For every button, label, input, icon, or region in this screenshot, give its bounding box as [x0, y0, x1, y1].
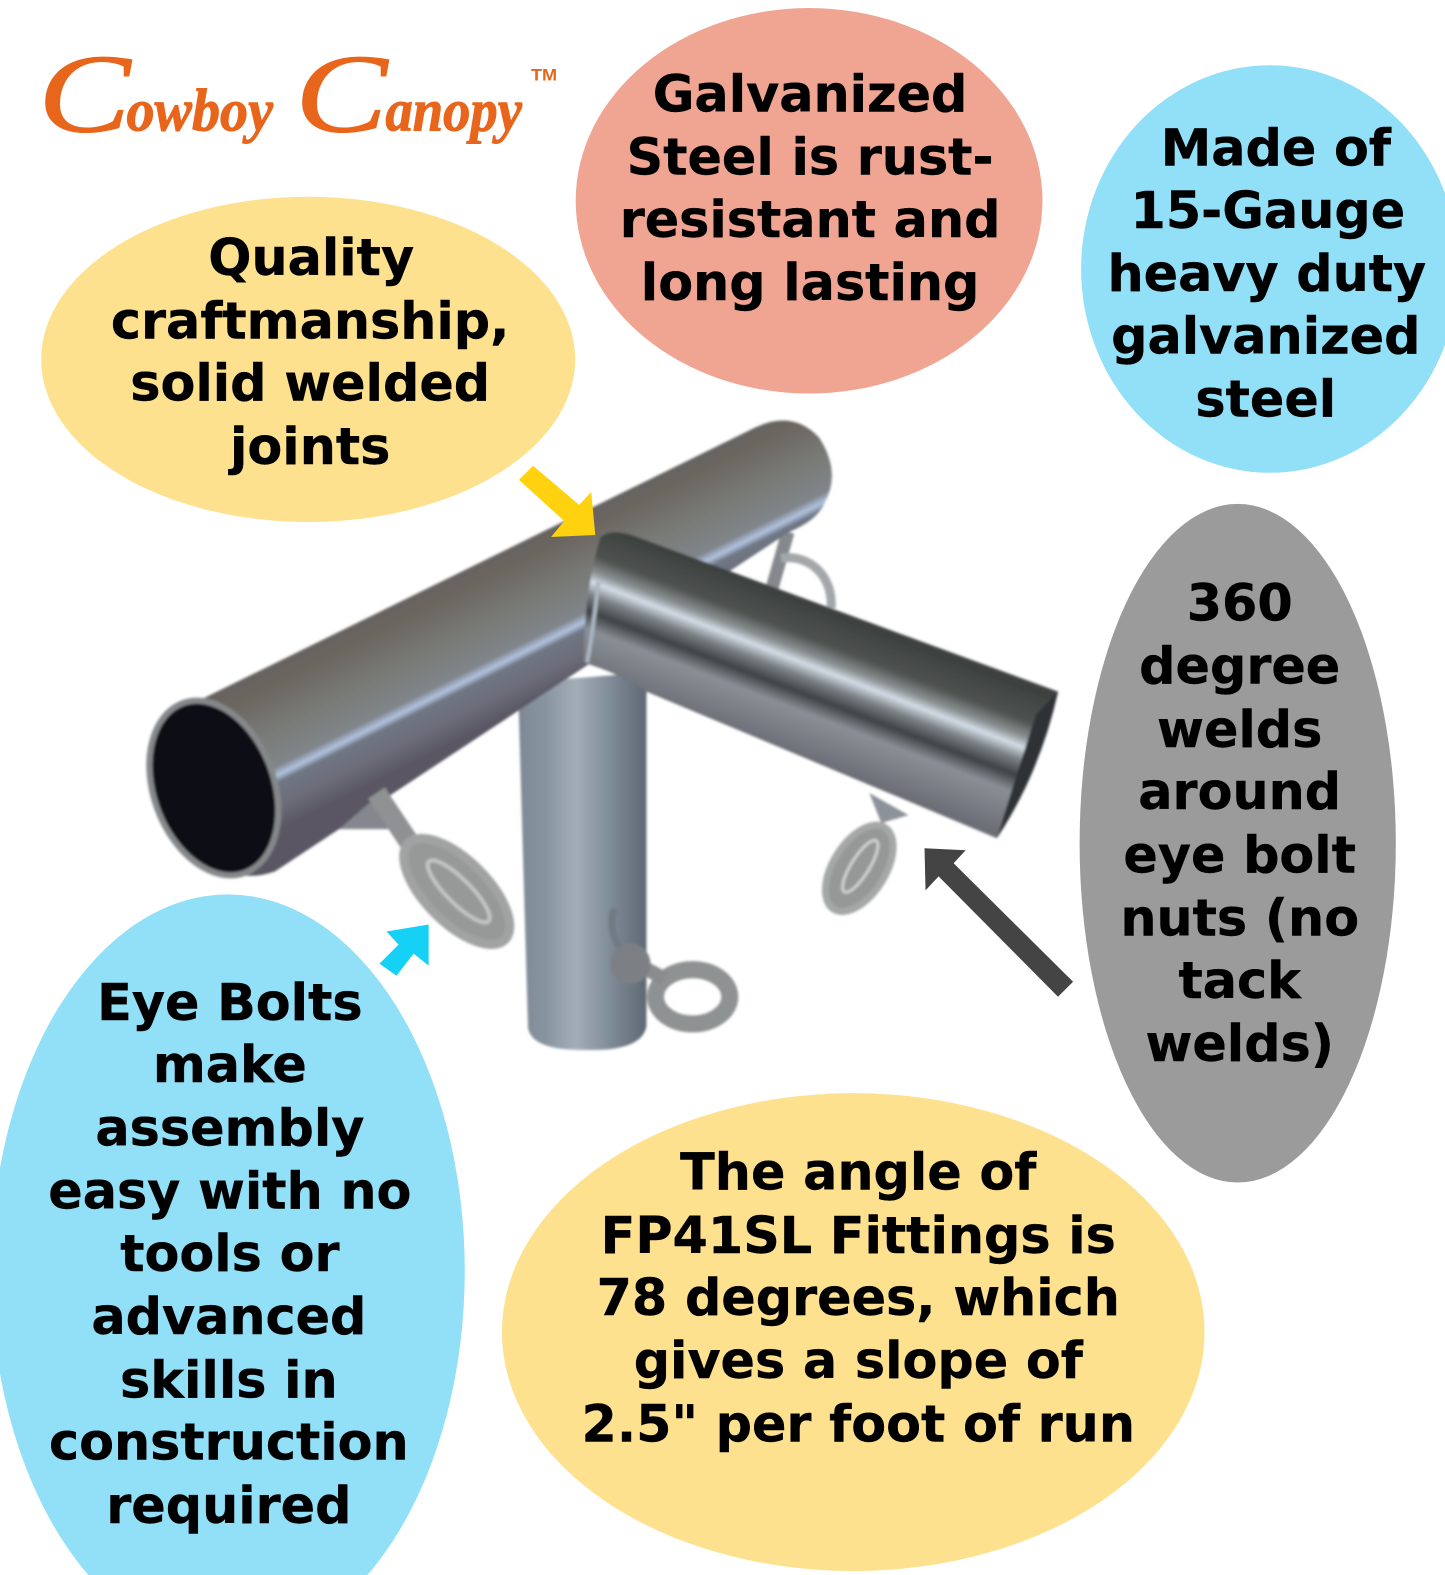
arrow: cyan to eye bolt	[379, 925, 429, 976]
callout: 360 degree welds: around	[1138, 762, 1341, 821]
callout: galvanized steel: Steel is rust-	[627, 128, 994, 187]
callout: quality craftsmanship: Quality	[208, 228, 414, 287]
callout: eye bolts: construction	[49, 1413, 409, 1472]
main tube	[203, 421, 832, 876]
callout: 15-gauge: galvanized	[1111, 306, 1420, 365]
main tube opening	[126, 683, 301, 893]
callout: eye bolts: make	[153, 1035, 307, 1094]
vertical tube	[518, 673, 646, 1050]
logo: Cowboy Canopy: anopy	[385, 77, 522, 144]
callout: quality craftsmanship: craftmanship,	[111, 291, 509, 350]
callout: angle of fittings: 78 degrees, which	[597, 1268, 1120, 1327]
eye bolt: front left	[339, 788, 527, 962]
callout: 15-gauge	[1081, 65, 1445, 473]
callout: quality craftsmanship	[41, 197, 575, 522]
callout: angle of fittings: The angle of	[680, 1143, 1037, 1202]
callout: eye bolts: advanced	[91, 1287, 366, 1346]
callout: 360 degree welds: eye bolt	[1123, 825, 1356, 884]
callout: 15-gauge: heavy duty	[1108, 244, 1426, 303]
callout: galvanized steel: long lasting	[641, 253, 979, 312]
weld collar at joint	[587, 582, 598, 663]
callout: eye bolts: easy with no	[48, 1162, 411, 1221]
callout: 360 degree welds	[1080, 504, 1396, 1183]
callout: angle of fittings: FP41SL Fittings is	[601, 1206, 1116, 1265]
callout: 15-gauge: 15-Gauge	[1131, 181, 1405, 240]
callout: galvanized steel: resistant and	[620, 190, 1000, 249]
callout: eye bolts	[0, 894, 465, 1575]
logo: Cowboy Canopy: owboy	[126, 77, 273, 144]
arrow: dark to eye bolt nut	[925, 848, 1073, 997]
logo: Cowboy Canopy: C	[38, 33, 133, 157]
callout: galvanized steel: Galvanized	[653, 64, 967, 123]
eye bolt: right	[812, 793, 908, 923]
right tube	[583, 532, 1058, 838]
logo: Cowboy Canopy	[38, 33, 522, 157]
callout: quality craftsmanship: solid welded	[130, 354, 490, 413]
callout: 15-gauge: Made of	[1161, 119, 1392, 178]
callout: 15-gauge: steel	[1195, 370, 1336, 429]
callout: 360 degree welds: tack	[1179, 951, 1302, 1010]
callout: angle of fittings: gives a slope of	[634, 1331, 1084, 1390]
callout: eye bolts: Eye Bolts	[97, 973, 363, 1032]
callout: angle of fittings	[502, 1093, 1205, 1571]
eye bolt: vertical tube	[610, 908, 730, 1024]
logo: Cowboy Canopy: C	[295, 33, 390, 157]
callout: eye bolts: tools or	[120, 1224, 340, 1283]
callout: quality craftsmanship: joints	[228, 417, 390, 476]
callout: eye bolts: assembly	[95, 1098, 364, 1157]
callout: eye bolts: skills in	[120, 1350, 338, 1409]
callout: eye bolts: required	[106, 1476, 351, 1535]
right tube end	[997, 692, 1058, 838]
callout: galvanized steel	[576, 8, 1042, 394]
trademark mark: TM	[531, 65, 557, 84]
callout: 360 degree welds: welds	[1157, 700, 1322, 759]
product photo: metal pipe fitting	[126, 421, 1058, 1050]
callout: angle of fittings: 2.5" per foot of run	[582, 1394, 1135, 1453]
callout: 360 degree welds: nuts (no	[1120, 889, 1359, 948]
callout: 360 degree welds: degree	[1139, 637, 1340, 696]
callout: 360 degree welds: 360	[1187, 573, 1293, 632]
callout: 360 degree welds: welds)	[1145, 1014, 1334, 1073]
eye bolt: rear	[771, 532, 831, 608]
arrow: yellow to weld	[519, 466, 595, 537]
